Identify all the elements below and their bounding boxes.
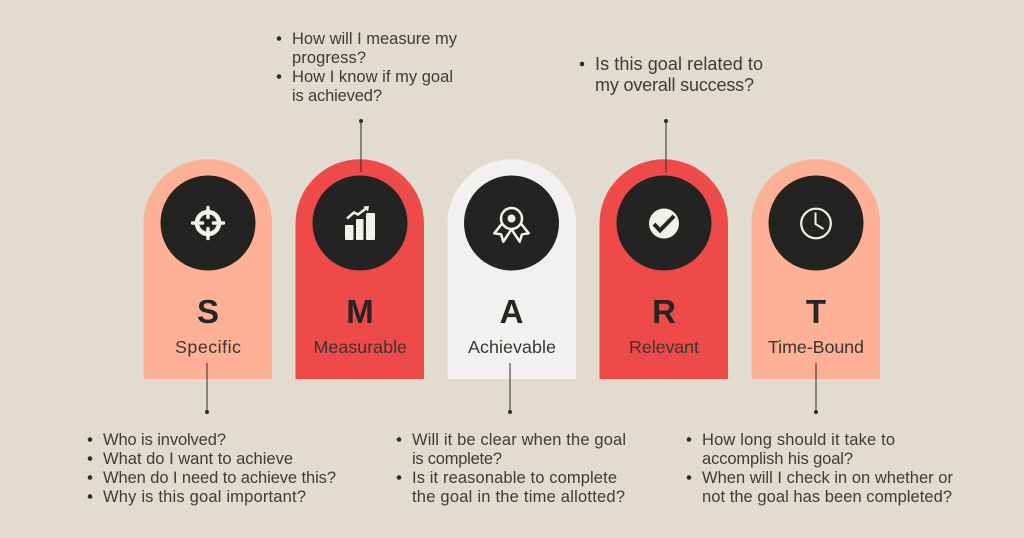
- card shape: Achievable: [448, 159, 576, 379]
- panel: Measurable: [296, 159, 424, 379]
- label Measurable: Measurable: [314, 337, 407, 357]
- text block: Measurable questions: [277, 30, 458, 105]
- card shape: Specific: [144, 159, 272, 379]
- connector: Relevant: [664, 119, 668, 172]
- icon: target crosshair: [160, 176, 256, 270]
- panel: Time-Bound: [752, 159, 880, 379]
- text block: Relevant questions: [580, 54, 763, 95]
- icon: award rosette: [464, 176, 559, 270]
- text block: Specific questions: Why is this goal important?: [103, 488, 306, 506]
- text block: Specific questions: What do I want to achieve: [103, 450, 293, 468]
- text block: Measurable questions: How will I measure my: [292, 30, 458, 48]
- text block: Specific questions: [88, 431, 336, 506]
- icon: rising bar chart: [312, 176, 408, 270]
- icon: clock: [768, 176, 864, 270]
- letter T: T: [806, 293, 826, 330]
- text block: Relevant questions: Is this goal related to: [595, 54, 763, 74]
- text block: Specific questions: When do I need to achieve this?: [103, 469, 336, 487]
- label Relevant: Relevant: [629, 337, 699, 357]
- connector: Achievable: [508, 363, 512, 414]
- letter M: M: [346, 293, 374, 330]
- panel: Specific: [144, 159, 272, 379]
- letter R: R: [652, 293, 676, 330]
- text block: Achievable questions: Is it reasonable to complete: [412, 469, 617, 487]
- card shape: Measurable: [296, 159, 424, 379]
- text block: Achievable questions: Will it be clear when the goal: [412, 431, 626, 449]
- text block: Time-Bound questions: accomplish his goal?: [702, 450, 853, 468]
- text block: Measurable questions: progress?: [292, 49, 366, 67]
- text block: Time-Bound questions: How long should it take to: [702, 431, 895, 449]
- text block: Time-Bound questions: [687, 431, 954, 506]
- text block: Time-Bound questions: not the goal has been completed?: [702, 488, 952, 506]
- text block: Measurable questions: How I know if my goal: [292, 68, 453, 86]
- connector: Time-Bound: [814, 363, 818, 414]
- text block: Time-Bound questions: When will I check in on whether or: [702, 469, 954, 487]
- letter S: S: [197, 293, 219, 330]
- text block: Achievable questions: [397, 431, 626, 506]
- label Achievable: Achievable: [468, 337, 556, 357]
- icon: check mark badge: [616, 176, 712, 270]
- label Time-Bound: Time-Bound: [768, 337, 864, 357]
- panel: Achievable: [448, 159, 576, 379]
- text block: Achievable questions: the goal in the time allotted?: [412, 488, 625, 506]
- text block: Specific questions: Who is involved?: [103, 431, 226, 449]
- label Specific: Specific: [175, 337, 241, 357]
- card shape: Relevant: [600, 159, 728, 379]
- connector: Measurable: [359, 119, 363, 172]
- panel: Relevant: [600, 159, 728, 379]
- letter A: A: [500, 293, 523, 330]
- text block: Measurable questions: is achieved?: [292, 87, 382, 105]
- card shape: Time-Bound: [752, 159, 880, 379]
- text block: Relevant questions: my overall success?: [595, 75, 754, 95]
- connector: Specific: [205, 363, 209, 414]
- text block: Achievable questions: is complete?: [412, 450, 502, 468]
